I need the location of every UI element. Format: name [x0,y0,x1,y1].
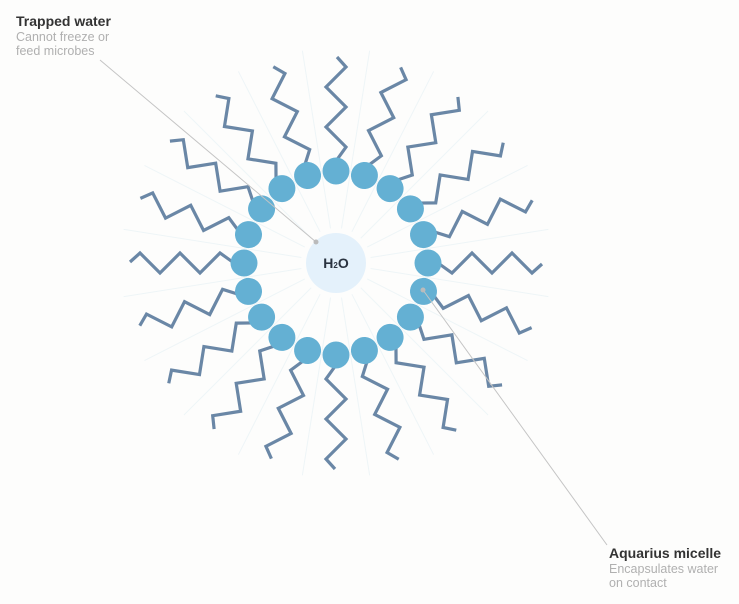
leader: micelle [420,288,607,545]
label: micelle: Encapsulates water [609,562,718,576]
label: micelle [609,545,721,590]
water core: H2O [323,255,349,271]
leader: trapped water [100,60,318,244]
label: trapped water: feed microbes [16,44,95,58]
label: trapped water: Trapped water [16,13,111,29]
label: micelle: on contact [609,576,667,590]
water core [306,233,366,293]
label: micelle: Aquarius micelle [609,545,721,561]
micelle [90,17,582,509]
label: trapped water: Cannot freeze or [16,30,109,44]
label: trapped water [16,13,111,58]
